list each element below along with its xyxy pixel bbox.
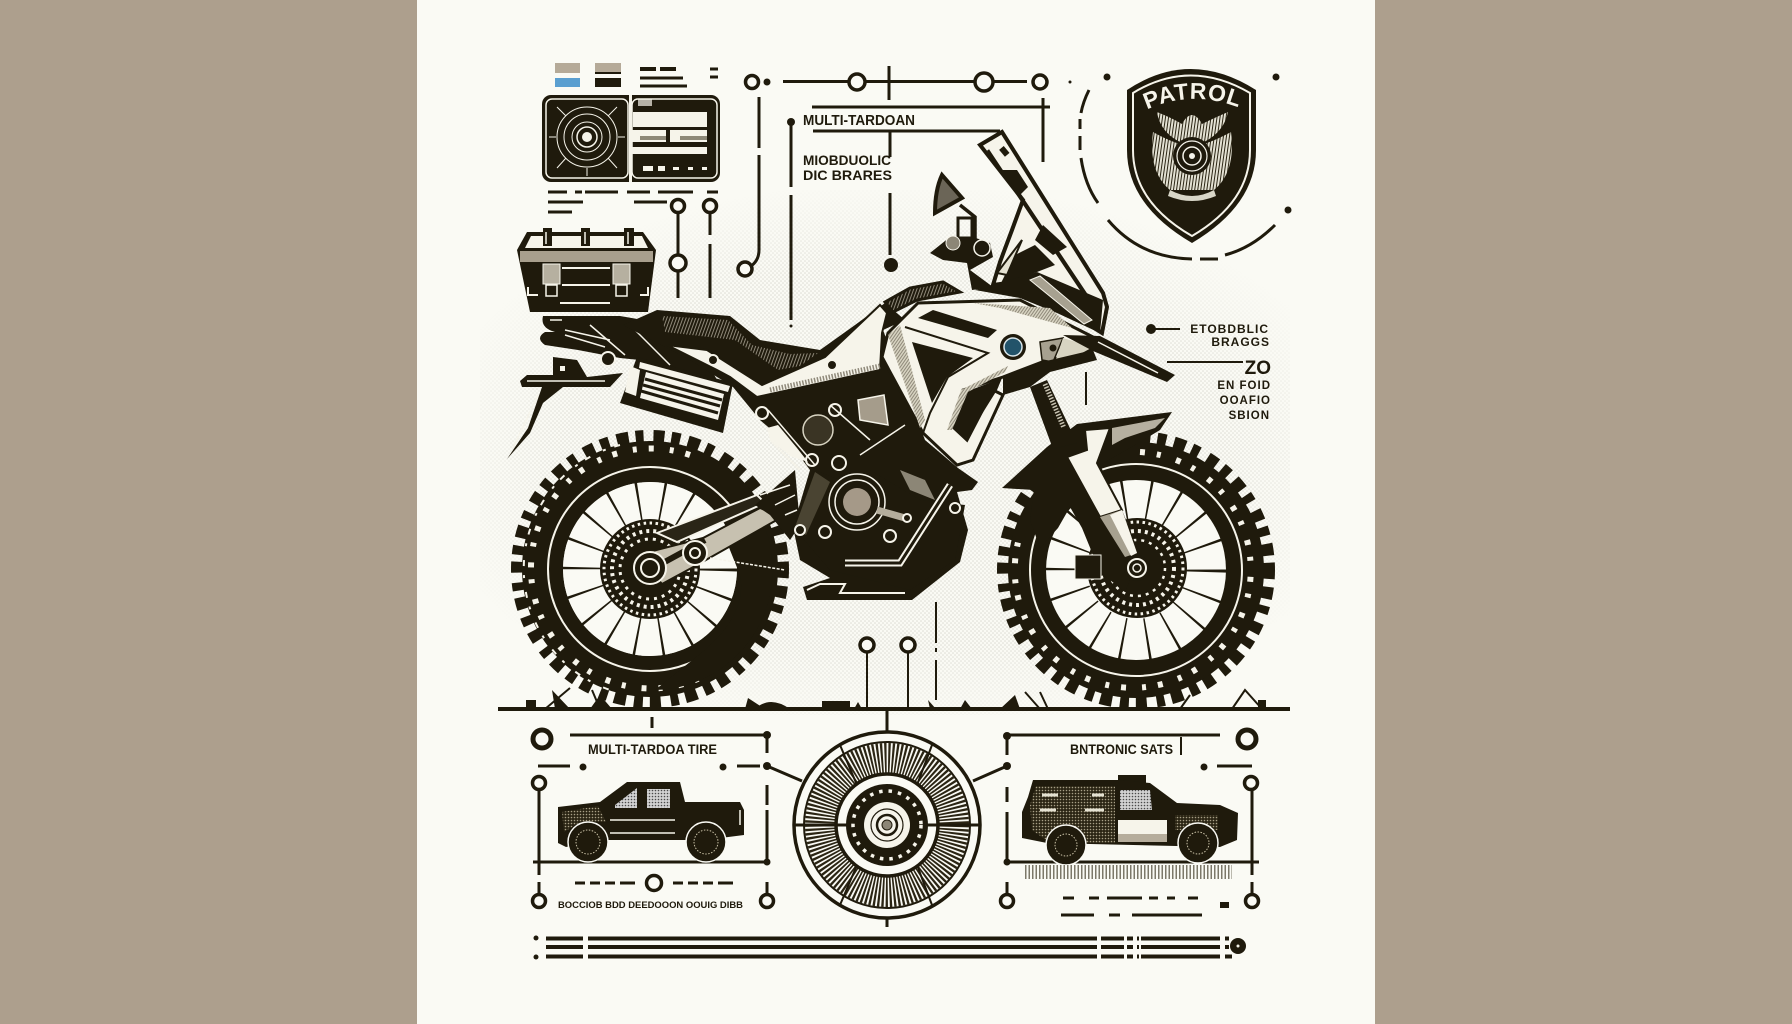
frame lines — [768, 405, 905, 470]
ground line with grass — [498, 688, 1290, 709]
label: disc brakes: DIC BRARES — [803, 167, 892, 183]
fork spring — [1045, 384, 1064, 428]
blue indicator — [1000, 334, 1026, 360]
emblem — [1152, 112, 1232, 201]
engine crankcase — [793, 470, 965, 590]
center wheel schematic — [794, 709, 980, 927]
electrical box — [858, 395, 888, 425]
paper panel — [417, 0, 1375, 1024]
patrol badge — [1127, 69, 1256, 243]
exhaust silencer — [620, 357, 733, 433]
shroud hatch top — [973, 303, 1072, 328]
lower left panel frame — [532, 717, 802, 908]
front brake caliper — [1075, 555, 1101, 579]
right label: number: ZO — [1245, 358, 1271, 379]
frame trellis window — [767, 425, 808, 462]
front fork upper — [1030, 380, 1077, 449]
fuel tank top — [885, 282, 960, 312]
control display panel — [542, 95, 720, 182]
shroud window top — [918, 310, 997, 338]
mirror — [935, 175, 975, 240]
windscreen — [980, 132, 1107, 333]
subframe bolts — [708, 355, 846, 470]
skid plate trim — [845, 485, 950, 563]
patrol SUV — [1022, 775, 1238, 865]
reflector — [1040, 338, 1063, 362]
right label connectors — [1086, 324, 1243, 405]
top leader line — [783, 66, 1050, 272]
rear linkage — [755, 470, 800, 540]
shroud window triangle — [912, 342, 973, 403]
shroud window lower — [953, 378, 1002, 438]
front fender and fork shadow — [1002, 412, 1172, 592]
under bike connectors — [860, 602, 936, 709]
front wheel — [1003, 437, 1269, 703]
fork white slider — [1067, 418, 1165, 581]
foot peg and lower guard — [807, 584, 905, 593]
right label: line one: EN FOID — [1217, 380, 1271, 392]
rear wheel shadow crescent — [655, 490, 773, 690]
lower right heading: BNTRONIC SATS — [1070, 742, 1173, 757]
lower left caption: BOCCIOB BDD DEEDOOON OOUIG DIBB — [558, 900, 744, 910]
top case luggage box — [517, 228, 656, 312]
right label: brakes: BRAGGS — [1211, 335, 1270, 349]
luggage rack — [540, 316, 720, 395]
patrol badge: PATROL — [1142, 83, 1238, 109]
shroud hatch lower — [947, 366, 1008, 430]
panel caption lines — [548, 192, 718, 212]
bottom rule block — [534, 936, 1246, 960]
label: multi-terrain: MULTI-TARDOAN — [803, 113, 915, 129]
side panel white — [667, 305, 887, 397]
halftone backdrop — [480, 190, 1290, 715]
lower left heading: MULTI-TARDOA TIRE — [588, 742, 717, 757]
rear wheel — [517, 436, 783, 702]
reservoir canister — [803, 415, 833, 445]
label: hydraulic: MIOBDUOLIC — [803, 152, 891, 168]
right label: line two: OOAFIO — [1220, 395, 1271, 407]
lower right panel frame — [973, 730, 1259, 915]
rear brake disc — [600, 519, 700, 619]
motorcycle main frame and engine mass — [623, 303, 978, 600]
fairing shroud — [882, 300, 1097, 465]
fairing beak — [1063, 335, 1175, 382]
mini legend — [555, 63, 718, 87]
fairing lower dark — [1003, 350, 1097, 395]
shroud inner edge — [905, 327, 988, 433]
badge dashed ring — [1068, 74, 1292, 259]
swingarm — [634, 495, 785, 584]
side panel inner trim — [770, 366, 880, 390]
front brake disc — [1087, 518, 1187, 618]
right label: line three: SBION — [1229, 410, 1270, 422]
SUV ground shadow — [1025, 865, 1232, 879]
callout connectors top left — [670, 76, 795, 328]
shroud hatch left — [888, 325, 925, 428]
seat texture — [662, 316, 818, 370]
pickup truck — [558, 782, 744, 862]
handlebar — [930, 236, 993, 290]
fairing dark wedge — [975, 272, 1103, 333]
rear tail fender — [507, 357, 623, 459]
right label: electronic: ETOBDBLIC — [1190, 322, 1269, 336]
